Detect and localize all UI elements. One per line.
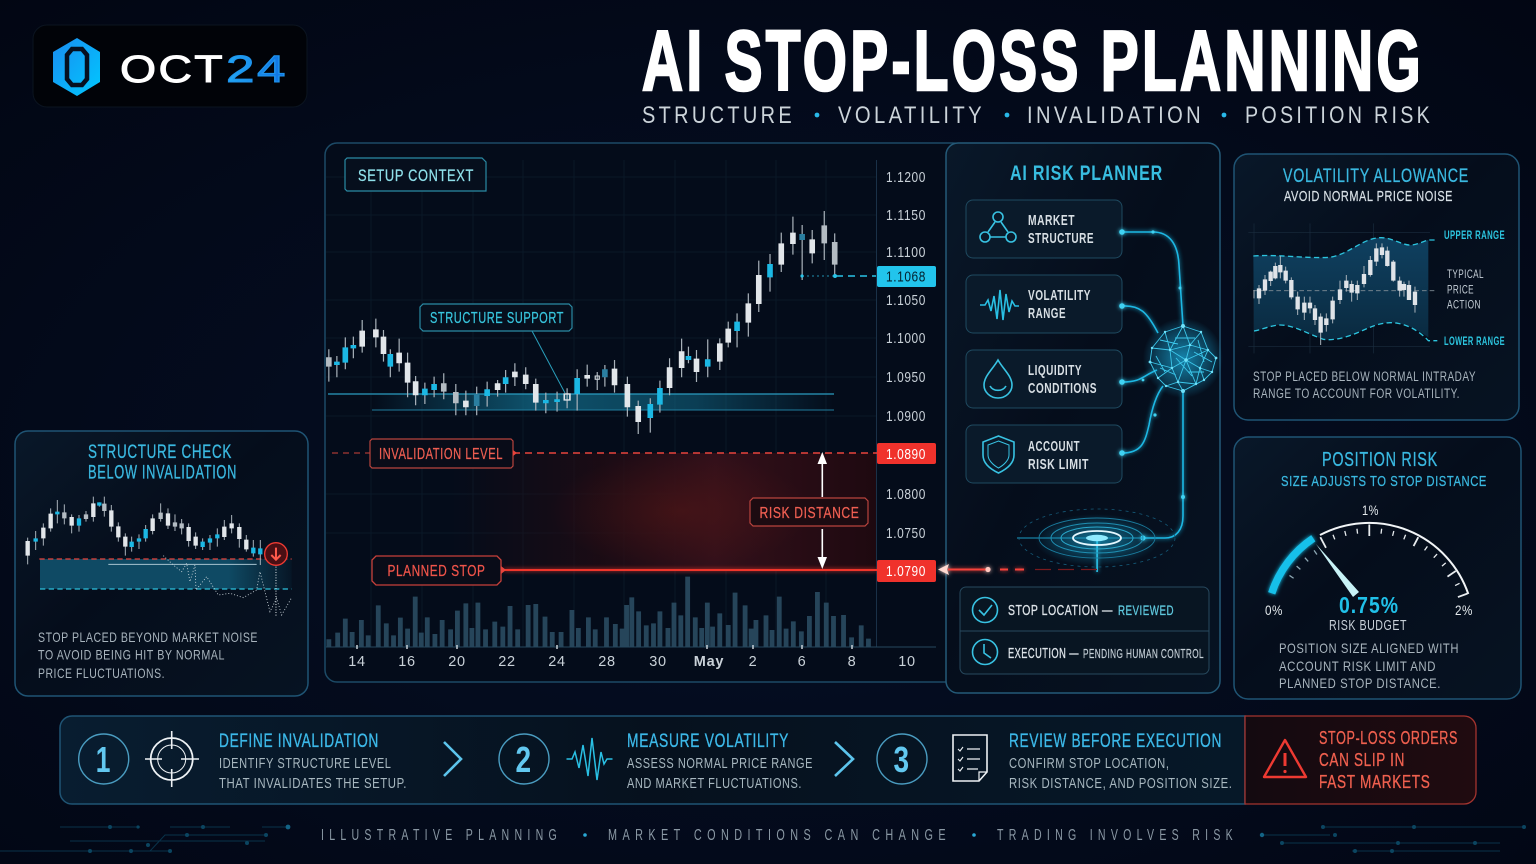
icon: crosshair xyxy=(145,731,199,787)
step text: THAT INVALIDATES THE SETUP. xyxy=(219,776,407,792)
description text xyxy=(1253,369,1476,401)
status: execution: EXECUTION — xyxy=(1008,646,1079,662)
footer disclaimer: ILLUSTRATIVE PLANNING xyxy=(321,827,562,844)
x axis: 28 xyxy=(598,654,616,670)
description text: TO AVOID BEING HIT BY NORMAL xyxy=(38,646,225,662)
subtitle xyxy=(642,102,1433,129)
circuit decoration left xyxy=(0,825,290,853)
gauge xyxy=(1265,502,1473,634)
icon: water drop xyxy=(984,360,1012,398)
label: typical price action: ACTION xyxy=(1447,300,1481,312)
icon: breach marker xyxy=(265,543,287,565)
logo wordmark: 24: 24 xyxy=(226,49,288,91)
icon: shield xyxy=(983,436,1014,473)
warning text: FAST MARKETS xyxy=(1319,772,1430,792)
structure support band xyxy=(328,394,834,410)
heading: position risk: POSITION RISK xyxy=(1322,449,1438,471)
x axis: 6 xyxy=(798,654,806,670)
card: volatility range: VOLATILITY xyxy=(1028,288,1091,304)
label: risk distance: RISK DISTANCE xyxy=(760,505,860,522)
heading: structure check xyxy=(88,442,237,484)
label: structure support xyxy=(420,304,572,393)
label: structure support: STRUCTURE SUPPORT xyxy=(430,310,564,327)
label: typical price action: TYPICAL xyxy=(1447,269,1484,281)
card: market structure xyxy=(966,200,1122,258)
heading: volatility allowance: VOLATILITY ALLOWANCE xyxy=(1283,165,1469,187)
label: planned stop xyxy=(372,556,506,585)
planned stop line xyxy=(504,569,877,571)
x axis xyxy=(326,645,936,670)
arrow: step 1 to 2 xyxy=(444,742,461,776)
icon: target disk xyxy=(1017,509,1175,572)
step number 1: 1 xyxy=(96,739,112,780)
subtitle: VOLATILITY xyxy=(838,102,985,129)
step text xyxy=(219,756,407,792)
arrow: step 2 to 3 xyxy=(835,742,853,776)
process bar xyxy=(60,716,1476,804)
step text xyxy=(627,756,813,792)
volatility chart xyxy=(1248,223,1437,353)
price axis labels: 1.1000 xyxy=(886,331,926,347)
step heading: REVIEW BEFORE EXECUTION xyxy=(1009,731,1222,752)
x axis: 16 xyxy=(398,654,416,670)
x axis: 8 xyxy=(848,654,856,670)
x axis: 20 xyxy=(448,654,466,670)
warning text: STOP-LOSS ORDERS xyxy=(1319,728,1458,748)
gauge needle xyxy=(1316,544,1359,597)
icon: clock xyxy=(972,640,998,664)
gauge value: 0.75% xyxy=(1339,592,1399,618)
price axis labels: 1.1100 xyxy=(886,245,926,261)
step text: ASSESS NORMAL PRICE RANGE xyxy=(627,756,813,772)
description text: PRICE FLUCTUATIONS. xyxy=(38,665,165,681)
x axis: May xyxy=(694,654,724,670)
subtitle: POSITION RISK xyxy=(1245,102,1433,129)
label: risk distance xyxy=(750,498,868,526)
panel: structure check xyxy=(15,431,308,696)
label: invalidation level: INVALIDATION LEVEL xyxy=(379,446,503,463)
x axis: 22 xyxy=(498,654,516,670)
candlestick chart xyxy=(329,211,835,434)
subheading: AVOID NORMAL PRICE NOISE xyxy=(1284,189,1453,205)
description text: POSITION SIZE ALIGNED WITH xyxy=(1279,640,1459,656)
card: liquidity conditions xyxy=(966,350,1122,408)
invalidation badge xyxy=(877,443,936,464)
description text xyxy=(1279,640,1459,691)
footer disclaimer: TRADING INVOLVES RISK xyxy=(997,827,1238,844)
arrow: risk distance xyxy=(818,452,827,569)
gauge scale labels: 2% xyxy=(1455,602,1473,618)
current price badge: 1.1068 xyxy=(886,270,926,286)
panel: volatility allowance xyxy=(1234,154,1519,420)
card: liquidity conditions: LIQUIDITY xyxy=(1028,363,1082,379)
gauge scale labels: 1% xyxy=(1362,502,1379,518)
gauge caption: RISK BUDGET xyxy=(1329,618,1407,634)
card: volatility range xyxy=(966,275,1122,333)
x axis: 30 xyxy=(649,654,667,670)
status: stop location: STOP LOCATION — xyxy=(1008,603,1113,619)
icon: checklist xyxy=(953,735,987,781)
gauge scale labels xyxy=(1265,502,1473,618)
footer disclaimer xyxy=(321,827,1238,844)
gauge scale labels: 0% xyxy=(1265,602,1283,618)
step text: AND MARKET FLUCTUATIONS. xyxy=(627,776,802,792)
panel: setup context chart xyxy=(325,143,965,682)
warning callout xyxy=(1245,716,1476,804)
logo xyxy=(33,25,307,107)
description text xyxy=(38,629,258,681)
card: account risk limit: RISK LIMIT xyxy=(1028,457,1089,473)
heading: ai risk planner: AI RISK PLANNER xyxy=(1010,162,1163,185)
step 1 xyxy=(79,731,407,792)
card: liquidity conditions: CONDITIONS xyxy=(1028,381,1097,397)
step heading: DEFINE INVALIDATION xyxy=(219,731,379,752)
current price dashed line xyxy=(800,274,876,278)
status value: reviewed: REVIEWED xyxy=(1118,602,1174,618)
x axis: 2 xyxy=(749,654,757,670)
step 2 xyxy=(499,731,813,792)
description text: RANGE TO ACCOUNT FOR VOLATILITY. xyxy=(1253,386,1460,401)
description text: STOP PLACED BEYOND MARKET NOISE xyxy=(38,629,258,645)
step number 2: 2 xyxy=(516,739,532,780)
panel: ai risk planner xyxy=(938,143,1223,693)
step 3 xyxy=(877,731,1232,792)
dotted price path xyxy=(163,556,292,615)
step number 2 xyxy=(499,734,549,784)
card: account risk limit: ACCOUNT xyxy=(1028,439,1080,455)
price axis labels: 1.0800 xyxy=(886,487,926,503)
label: planned stop: PLANNED STOP xyxy=(388,563,486,580)
invalidation badge: 1.0890 xyxy=(886,447,926,463)
card: volatility range: RANGE xyxy=(1028,306,1066,322)
step number 3: 3 xyxy=(894,739,910,780)
icon: waveform xyxy=(980,290,1019,320)
price axis labels xyxy=(886,170,926,542)
card: market structure: MARKET xyxy=(1028,213,1075,229)
icon: check xyxy=(972,598,998,622)
price axis labels: 1.0750 xyxy=(886,526,926,542)
status box xyxy=(960,587,1209,674)
label: typical price action xyxy=(1447,269,1484,312)
arrow: planned stop signal xyxy=(938,564,1097,575)
heading: structure check: BELOW INVALIDATION xyxy=(88,462,237,484)
red risk zone xyxy=(450,453,877,570)
step text: CONFIRM STOP LOCATION, xyxy=(1009,756,1170,772)
y axis line xyxy=(876,160,878,647)
subtitle: STRUCTURE xyxy=(642,102,795,129)
tag: setup context: SETUP CONTEXT xyxy=(358,166,474,185)
step heading: MEASURE VOLATILITY xyxy=(627,731,789,752)
icon: hexagon mark xyxy=(53,38,100,96)
price axis labels: 1.1200 xyxy=(886,170,926,186)
x axis: 10 xyxy=(898,654,916,670)
warning text: CAN SLIP IN xyxy=(1319,750,1405,770)
step text: IDENTIFY STRUCTURE LEVEL xyxy=(219,756,392,772)
price axis labels: 1.0900 xyxy=(886,409,926,425)
planned stop badge: 1.0790 xyxy=(886,564,926,580)
volatility band xyxy=(1253,238,1428,340)
card: market structure: STRUCTURE xyxy=(1028,231,1094,247)
step text xyxy=(1009,756,1232,792)
invalidation line xyxy=(332,452,877,454)
panel: position risk xyxy=(1234,437,1521,699)
x axis: 14 xyxy=(348,654,366,670)
icon: warning triangle xyxy=(1264,740,1306,777)
icon: ai neural globe xyxy=(1143,318,1223,398)
status value: pending human control: PENDING HUMAN CONTROL xyxy=(1083,647,1204,661)
volume bars xyxy=(329,577,868,647)
logo wordmark: OCT: OCT xyxy=(120,49,225,91)
description text: ACCOUNT RISK LIMIT AND xyxy=(1279,658,1436,674)
label: invalidation level xyxy=(370,439,517,468)
tag: setup context xyxy=(345,158,486,191)
connector lines xyxy=(1122,232,1183,538)
price axis labels: 1.0950 xyxy=(886,370,926,386)
mini candlestick chart xyxy=(28,497,292,617)
description text: PLANNED STOP DISTANCE. xyxy=(1279,675,1441,691)
label: typical price action: PRICE xyxy=(1447,284,1474,296)
price axis labels: 1.1150 xyxy=(886,208,926,224)
price axis labels: 1.1050 xyxy=(886,293,926,309)
card: account risk limit xyxy=(966,425,1122,483)
x axis: 24 xyxy=(548,654,566,670)
step number 1 xyxy=(79,734,129,784)
step text: RISK DISTANCE, AND POSITION SIZE. xyxy=(1009,776,1232,792)
circuit decoration right xyxy=(1260,825,1526,853)
label: lower range: LOWER RANGE xyxy=(1444,336,1505,348)
current price badge xyxy=(877,266,936,287)
subtitle: INVALIDATION xyxy=(1027,102,1204,129)
connector nodes xyxy=(1119,229,1185,541)
label: upper range: UPPER RANGE xyxy=(1444,230,1505,242)
heading: structure check: STRUCTURE CHECK xyxy=(88,442,232,463)
icon: waveform xyxy=(566,738,612,780)
planned stop badge xyxy=(877,560,936,582)
icon: network triangle xyxy=(980,212,1016,242)
warning text xyxy=(1319,728,1458,792)
step number 3 xyxy=(877,734,927,784)
footer disclaimer: MARKET CONDITIONS CAN CHANGE xyxy=(608,827,951,844)
